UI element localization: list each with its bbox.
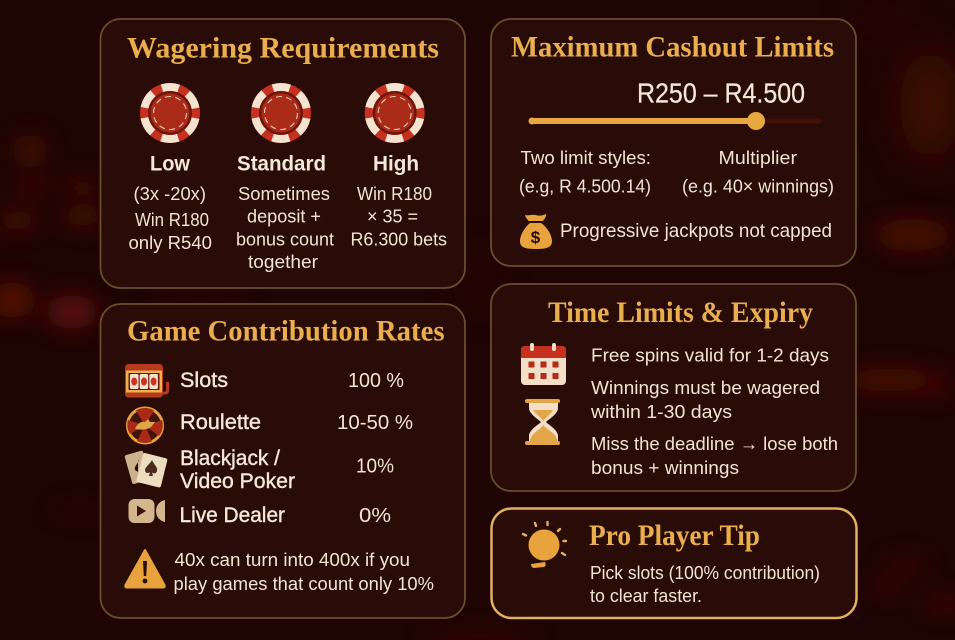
column: standard: together xyxy=(248,251,318,272)
label: blackjack row xyxy=(180,447,394,493)
label: roulette row xyxy=(180,411,413,434)
label: slots row xyxy=(180,369,404,392)
icon: money bag: $ xyxy=(531,228,541,247)
heading: maximum cashout limits: Maximum Cashout Limits xyxy=(511,31,834,64)
text: time limit lines xyxy=(590,344,838,478)
text: time limit lines: Miss the deadline → lose both xyxy=(591,433,838,454)
label: blackjack row: Blackjack / xyxy=(180,447,280,470)
panel: game contribution rates xyxy=(100,304,465,618)
column: standard: Standard xyxy=(237,152,326,176)
panel: maximum cashout limits xyxy=(491,19,856,266)
label: slots row: Slots xyxy=(180,369,228,392)
label: live dealer row xyxy=(180,504,391,527)
column: standard: deposit + xyxy=(247,206,321,227)
text: tip body: Pick slots (100% contribution) xyxy=(590,562,820,583)
text: time limit lines: Free spins valid for 1-2 days xyxy=(591,344,829,366)
label: slots row: 100 % xyxy=(348,370,404,392)
label: blackjack row: Video Poker xyxy=(180,470,295,493)
icon: low chip xyxy=(140,83,200,143)
text: tip body: to clear faster. xyxy=(590,585,702,606)
column: standard: Sometimes xyxy=(238,183,330,204)
callout: warning text: play games that count only 10% xyxy=(174,573,434,594)
text: multiplier xyxy=(682,147,834,196)
icon: calendar xyxy=(521,343,566,385)
column: high xyxy=(350,152,447,250)
panel: wagering requirements xyxy=(100,19,465,288)
column: low: Low xyxy=(150,152,191,176)
label: roulette row: Roulette xyxy=(180,411,261,434)
column: low: Win R180 xyxy=(135,209,209,230)
heading: wagering requirements: Wagering Requirements xyxy=(127,32,439,64)
icon: high chip xyxy=(365,83,425,143)
text: two limit styles: Two limit styles: xyxy=(520,147,651,168)
heading: game contribution rates: Game Contribution Rates xyxy=(127,314,444,348)
panel: time limits and expiry xyxy=(491,284,856,491)
icon: warning triangle xyxy=(125,550,165,588)
column: low: (3x -20x) xyxy=(134,183,206,204)
label: live dealer row: Live Dealer xyxy=(180,504,285,527)
heading: time limits and expiry: Time Limits & Expiry xyxy=(548,296,813,329)
label: live dealer row: 0% xyxy=(359,505,391,527)
text: two limit styles xyxy=(519,147,651,196)
range value: R250 – R4.500 xyxy=(637,78,805,108)
text: tip body xyxy=(590,562,820,606)
column: low xyxy=(128,152,212,253)
icon: light bulb xyxy=(523,522,566,568)
callout: warning text xyxy=(174,549,434,594)
column: high: × 35 = xyxy=(367,206,418,227)
column: high: Win R180 xyxy=(357,183,432,204)
column: standard xyxy=(236,152,334,272)
icon: money bag xyxy=(520,214,552,249)
label: roulette row: 10-50 % xyxy=(337,412,413,434)
panel: pro player tip xyxy=(492,508,856,618)
text: two limit styles: (e.g, R 4.500.14) xyxy=(519,176,651,196)
icon: hourglass xyxy=(525,399,560,445)
icon: roulette wheel xyxy=(127,408,163,443)
text: multiplier: Multiplier xyxy=(718,147,797,168)
text: time limit lines: Winnings must be wagered xyxy=(591,377,820,398)
icon: standard chip xyxy=(251,83,311,143)
column: high: High xyxy=(373,152,419,176)
column: high: R6.300 bets xyxy=(350,229,447,250)
text: progressive jackpots: Progressive jackpots not capped xyxy=(560,220,832,242)
text: time limit lines: bonus + winnings xyxy=(591,457,739,478)
column: standard: bonus count xyxy=(236,229,334,250)
label: blackjack row: 10% xyxy=(356,456,394,478)
column: low: only R540 xyxy=(128,232,212,253)
slider xyxy=(528,112,822,130)
text: multiplier: (e.g. 40× winnings) xyxy=(682,176,834,196)
heading: pro player tip: Pro Player Tip xyxy=(589,519,760,552)
icon: video camera xyxy=(128,499,165,523)
callout: warning text: 40x can turn into 400x if you xyxy=(174,549,410,570)
icon: slot machine xyxy=(125,364,168,398)
text: time limit lines: within 1-30 days xyxy=(590,401,732,422)
icon: playing cards xyxy=(124,450,168,488)
